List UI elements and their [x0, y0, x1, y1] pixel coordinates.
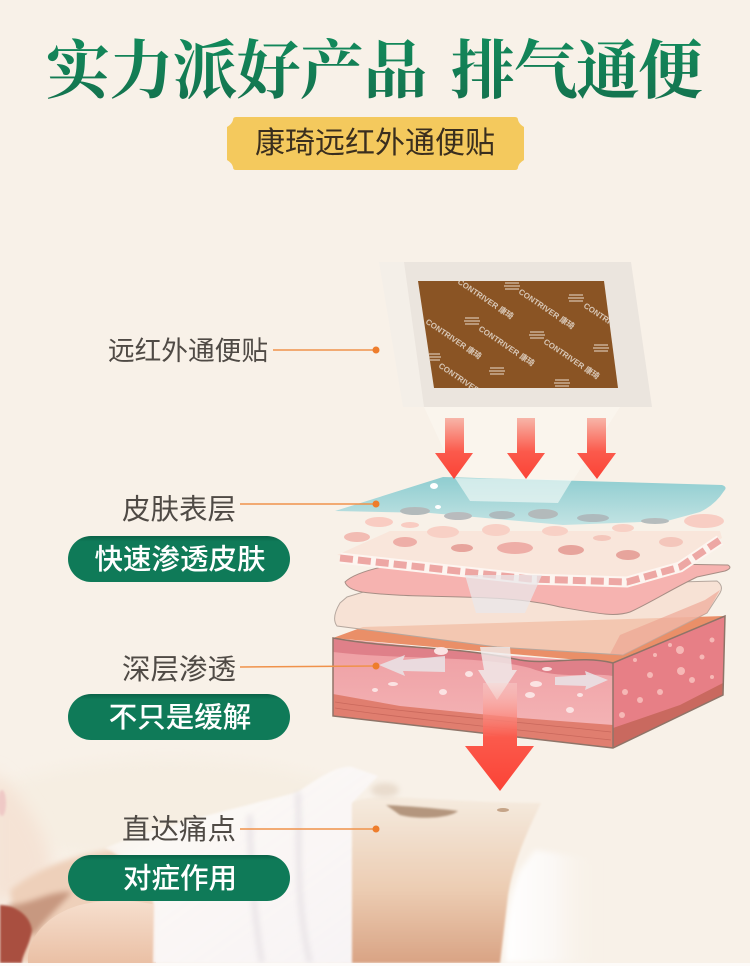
neck shadow — [8, 892, 72, 935]
torso — [352, 797, 541, 963]
fold shadow — [371, 783, 399, 797]
neck and chest — [10, 850, 156, 963]
patch translucent left edge — [379, 262, 425, 407]
block orange top — [333, 616, 725, 663]
patch printed brand text: CONTRIVER — [437, 361, 481, 395]
layer: beige dermis sheet — [335, 581, 721, 655]
title — [46, 20, 702, 112]
patch printed brand text: CONTRIVER 康琦 — [542, 336, 602, 381]
label: skin surface: 皮肤表层 — [122, 494, 236, 526]
downward beam in block — [478, 647, 517, 700]
patch product — [379, 262, 652, 407]
patch printed brand text: CONTRIVER 康琦 — [477, 323, 537, 368]
horizontal spreading arrows — [379, 655, 608, 690]
patch printed brand text: CONTRIVER 康琦 — [456, 276, 516, 321]
label: patch — [108, 336, 380, 366]
towel folds — [250, 792, 310, 963]
patch printed brand text — [426, 281, 610, 388]
block muscle band — [333, 694, 613, 748]
cell sheet scalloped columns — [340, 540, 720, 582]
layer: blue epidermis — [335, 477, 726, 525]
beige sheet pink edge — [610, 590, 720, 655]
title: 排气通便 — [451, 20, 702, 112]
block muscle fibres — [335, 702, 611, 740]
pill: not just relief: 不只是缓解 — [109, 702, 251, 734]
bottom white strip — [0, 963, 750, 966]
block front face — [333, 638, 613, 748]
block dark upper band — [333, 638, 613, 676]
hair — [0, 905, 32, 963]
towel over chest — [105, 767, 378, 963]
patch printed brand text: CONTRIVER 康琦 — [424, 316, 484, 361]
layer: peach cell sheet — [337, 531, 722, 577]
pill: fast penetration: 快速渗透皮肤 — [94, 544, 266, 576]
navel — [497, 808, 509, 812]
front face droplets — [372, 647, 583, 713]
label: deep penetration — [122, 654, 380, 686]
title: 实力派好产品 — [46, 20, 427, 112]
face — [0, 780, 52, 902]
label: patch: 远红外通便贴 — [108, 336, 268, 366]
arrows: three down arrows — [435, 418, 616, 479]
arm — [28, 900, 156, 963]
patch printed brand text: CONTRIVER 康琦 — [517, 286, 577, 331]
pill: fast penetration — [68, 536, 290, 582]
patch brown pad — [418, 281, 618, 388]
block right lower muscle — [613, 683, 723, 748]
patch foam backing — [404, 262, 652, 407]
right towel — [504, 851, 562, 963]
block outline — [333, 616, 725, 748]
skin layers diagram — [333, 477, 730, 748]
pill: not just relief — [68, 694, 290, 740]
subtitle tag: 康琦远红外通便贴 — [255, 127, 495, 160]
subtitle tag — [227, 117, 524, 170]
big red down arrow — [465, 683, 534, 791]
beam through layers — [465, 575, 542, 613]
pill: targeted action: 对症作用 — [123, 863, 237, 895]
layer: pink sheet — [345, 560, 730, 614]
pill: targeted action — [68, 855, 290, 901]
label: reach pain point: 直达痛点 — [122, 814, 236, 846]
block right face — [613, 616, 725, 748]
cell sheet white strip — [340, 540, 720, 582]
label: skin surface — [122, 494, 380, 526]
cell blobs — [344, 514, 724, 560]
right face dots — [619, 638, 714, 718]
label: reach pain point — [122, 814, 380, 846]
patch printed brand text: CONTRIVER 康琦 — [582, 300, 642, 345]
soft backdrop behind woman — [0, 760, 360, 860]
label: deep penetration: 深层渗透 — [122, 654, 236, 686]
translucent beam under patch — [424, 407, 620, 485]
lips — [0, 790, 6, 816]
rib shadow — [386, 805, 458, 818]
photo: woman lying with towel and bare abdomen — [0, 760, 600, 963]
